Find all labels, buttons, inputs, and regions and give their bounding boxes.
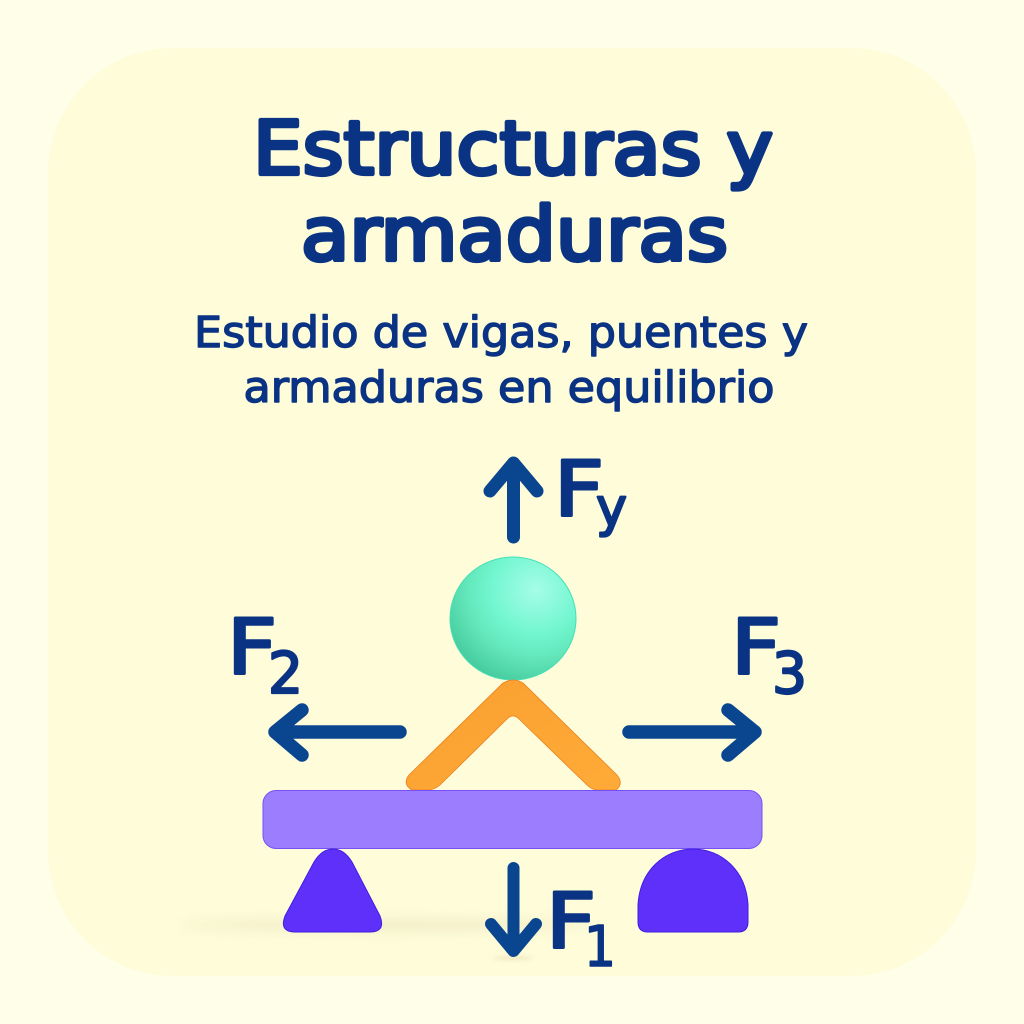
label: Fy: F (554, 444, 604, 534)
truss (406, 680, 620, 790)
title (253, 106, 773, 278)
arrow: Fy up (490, 463, 537, 537)
label: F1: 1 (584, 915, 616, 980)
left support (283, 849, 382, 932)
title: armaduras (301, 192, 728, 278)
arrow: F2 left (275, 710, 400, 755)
label: F2: F (227, 602, 277, 692)
title: Estructuras y (253, 106, 773, 192)
beam (263, 790, 762, 848)
right support (638, 849, 748, 932)
label: F2: 2 (268, 641, 303, 707)
arrow: F1 down (491, 868, 536, 951)
label: F3: 3 (772, 641, 807, 707)
label: F3 (731, 602, 807, 707)
label: F2 (227, 602, 303, 707)
arrow: F3 right (629, 710, 755, 755)
subtitle: armaduras en equilibrio (244, 364, 774, 413)
subtitle (194, 309, 808, 413)
subtitle: Estudio de vigas, puentes y (194, 309, 808, 358)
ground shadow (180, 920, 590, 960)
label: F1 (546, 876, 616, 980)
label: F1: F (546, 876, 596, 966)
label: F3: F (731, 602, 781, 692)
label: Fy (554, 444, 627, 538)
label: Fy: y (596, 478, 627, 538)
ball (450, 557, 576, 680)
